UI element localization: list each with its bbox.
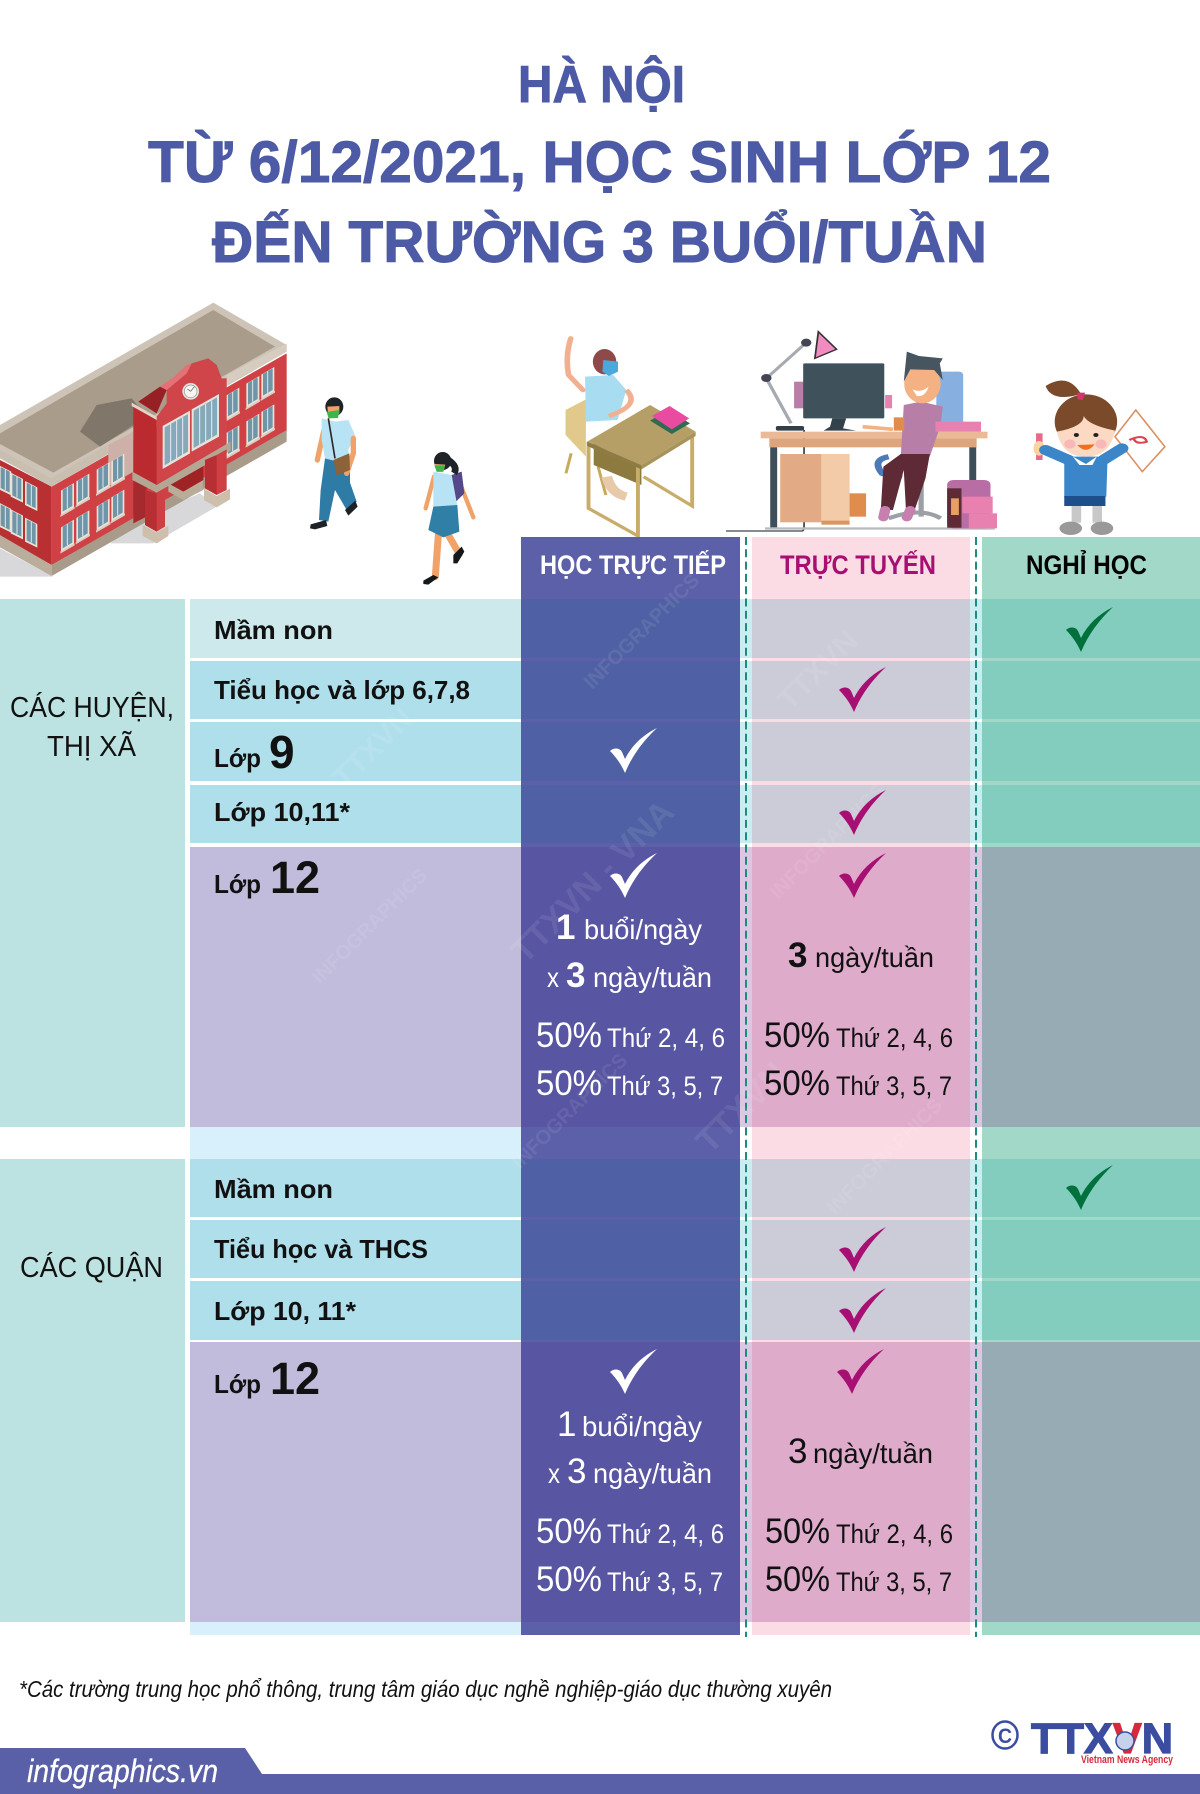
- label: lớp 12, urban: Lớp: [214, 1369, 261, 1399]
- schedule: urban, in person: 50%: [536, 1512, 602, 1551]
- panel: urban districts: [0, 1159, 185, 1622]
- illustration: student at desk: [566, 338, 696, 536]
- check: tiểu học urban, trực tuyến: [839, 1227, 886, 1272]
- schedule: urban, online: [765, 1432, 953, 1599]
- schedule: urban, online: 50%: [765, 1560, 830, 1599]
- label: lớp 9: [214, 726, 295, 778]
- check: lớp 12 urban, trực tuyến: [837, 1349, 884, 1394]
- title line 3: ĐẾN TRƯỜNG 3 BUỔI/TUẦN: [212, 210, 987, 275]
- label: tiểu học và lớp 6,7,8: Tiểu học và lớp 6,7,8: [214, 675, 470, 705]
- label: tiểu học và THCS: Tiểu học và THCS: [214, 1234, 428, 1264]
- text: INFOGRAPHICS: [766, 780, 890, 904]
- check: lớp 12, trực tiếp: [610, 853, 657, 898]
- schedule: districts, online: ngày/tuần: [815, 942, 934, 973]
- gutters between columns: [740, 599, 982, 1622]
- panel: districts: [0, 599, 185, 1127]
- table: column backgrounds: [0, 537, 1200, 1635]
- column: school levels: [190, 599, 521, 1635]
- schedule: urban, in person: buổi/ngày: [582, 1411, 702, 1442]
- column: nghỉ học: [982, 537, 1200, 1635]
- schedule: urban, in person: 3: [567, 1452, 586, 1491]
- schedule: urban, in person: 50%: [536, 1560, 602, 1599]
- label: lớp 12, urban: 12: [270, 1353, 320, 1404]
- schedule: urban, online: Thứ 2, 4, 6: [836, 1519, 953, 1549]
- logo: TTXVN: Vietnam News Agency: [1081, 1754, 1174, 1766]
- logo: TTXVN: TTXVN: [1031, 1715, 1173, 1763]
- text: INFOGRAPHICS: [508, 1050, 632, 1174]
- schedule: districts, in person: 1: [556, 908, 575, 947]
- label: lớp 9: 9: [269, 726, 295, 778]
- schedule: urban, online: 3: [788, 1432, 807, 1471]
- check: lớp 10-11, trực tuyến: [839, 790, 886, 835]
- schedule: districts, online: 3: [788, 936, 807, 975]
- label: các huyện, thị xã: THỊ XÃ: [47, 729, 137, 763]
- schedule: districts, in person: x: [547, 962, 559, 993]
- column: trực tuyến: [752, 537, 970, 1635]
- header: học trực tiếp: HỌC TRỰC TIẾP: [540, 549, 726, 580]
- schedule: districts, online: Thứ 2, 4, 6: [836, 1023, 953, 1053]
- schedule: districts, online: 50%: [764, 1064, 830, 1103]
- label: lớp 10, 11: Lớp 10, 11*: [214, 1296, 357, 1326]
- check: lớp 12, trực tuyến: [839, 853, 886, 898]
- header: trực tuyến: TRỰC TUYẾN: [780, 549, 936, 580]
- schedule: urban, in person: [536, 1405, 724, 1599]
- logo: TTXVN: C: [998, 1725, 1012, 1748]
- text: TTXVN: [772, 624, 864, 717]
- label: lớp 12: [214, 852, 320, 903]
- column headers: [540, 548, 1147, 580]
- text: TTXVN: [689, 1055, 794, 1161]
- schedule: urban, online: ngày/tuần: [813, 1438, 933, 1469]
- label: lớp 12: 12: [270, 852, 320, 903]
- schedule: districts, in person: Thứ 3, 5, 7: [607, 1071, 723, 1101]
- illustration: little girl with crayon and drawing: [1033, 381, 1165, 535]
- schedule: districts, online: 50%: [764, 1016, 830, 1055]
- schedule: urban, in person: Thứ 2, 4, 6: [607, 1519, 724, 1549]
- text: TTXVN: [327, 702, 419, 795]
- label: các huyện, thị xã: CÁC HUYỆN,: [10, 691, 174, 724]
- school level labels: [214, 615, 470, 1404]
- label: lớp 10,11: Lớp 10,11*: [214, 797, 351, 827]
- illustration: woman walking: [423, 452, 473, 585]
- schedule: urban, in person: Thứ 3, 5, 7: [607, 1567, 723, 1597]
- title: [148, 55, 1051, 275]
- label: mầm non, urban: Mầm non: [214, 1174, 333, 1204]
- schedule: districts, online: Thứ 3, 5, 7: [836, 1071, 952, 1101]
- footer site name: infographics.vn: [27, 1753, 218, 1789]
- check marks: [610, 607, 1113, 1394]
- text: INFOGRAPHICS: [308, 865, 432, 989]
- schedule: urban, online: 50%: [765, 1512, 830, 1551]
- label: các quận: CÁC QUẬN: [20, 1251, 163, 1284]
- check: lớp 10-11 urban, trực tuyến: [839, 1288, 886, 1333]
- text: TTXVN - VNA: [504, 793, 682, 971]
- region labels: [10, 691, 174, 1284]
- text: INFOGRAPHICS: [823, 1095, 947, 1219]
- label: các huyện, thị xã: [10, 691, 174, 763]
- header: nghỉ học: NGHỈ HỌC: [1026, 548, 1147, 580]
- footer bar: [0, 1748, 1200, 1794]
- schedule: urban, online: Thứ 3, 5, 7: [836, 1567, 952, 1597]
- check: mầm non urban, nghỉ học: [1066, 1165, 1113, 1210]
- schedule: districts, in person: Thứ 2, 4, 6: [607, 1023, 725, 1053]
- schedule: urban, in person: 1: [557, 1405, 576, 1444]
- schedule: districts, in person: 3: [566, 956, 585, 995]
- check: lớp 9, trực tiếp: [610, 728, 657, 773]
- check: tiểu học, trực tuyến: [839, 667, 886, 712]
- check: mầm non, nghỉ học: [1066, 607, 1113, 652]
- schedule: urban, in person: x: [548, 1458, 560, 1489]
- schedule: districts, in person: 50%: [536, 1064, 602, 1103]
- schedule: districts, online: [764, 936, 953, 1103]
- schedule: districts, in person: buổi/ngày: [584, 914, 702, 945]
- check: lớp 12 urban, trực tiếp: [610, 1349, 657, 1394]
- schedule: districts, in person: 50%: [536, 1016, 602, 1055]
- schedule: urban, in person: ngày/tuần: [593, 1458, 712, 1489]
- illustration: school building: [0, 303, 287, 577]
- title line 1: HÀ NỘI: [518, 55, 685, 114]
- illustration: student at computer: [726, 332, 997, 531]
- text: INFOGRAPHICS: [580, 570, 704, 694]
- label: lớp 12: Lớp: [214, 869, 261, 899]
- label: lớp 9: Lớp: [214, 743, 261, 773]
- schedule: districts, in person: ngày/tuần: [593, 962, 712, 993]
- illustration: man walking: [310, 397, 358, 529]
- column: học trực tiếp: [521, 537, 740, 1635]
- label: lớp 12, urban: [214, 1353, 320, 1404]
- footnote: *Các trường trung học phổ thông, trung tâm giáo dục nghề nghiệp-giáo dục thường xuyên: [19, 1676, 832, 1702]
- label: mầm non: Mầm non: [214, 615, 333, 645]
- schedule: districts, in person: [536, 908, 725, 1103]
- title line 2: TỪ 6/12/2021, HỌC SINH LỚP 12: [148, 130, 1051, 195]
